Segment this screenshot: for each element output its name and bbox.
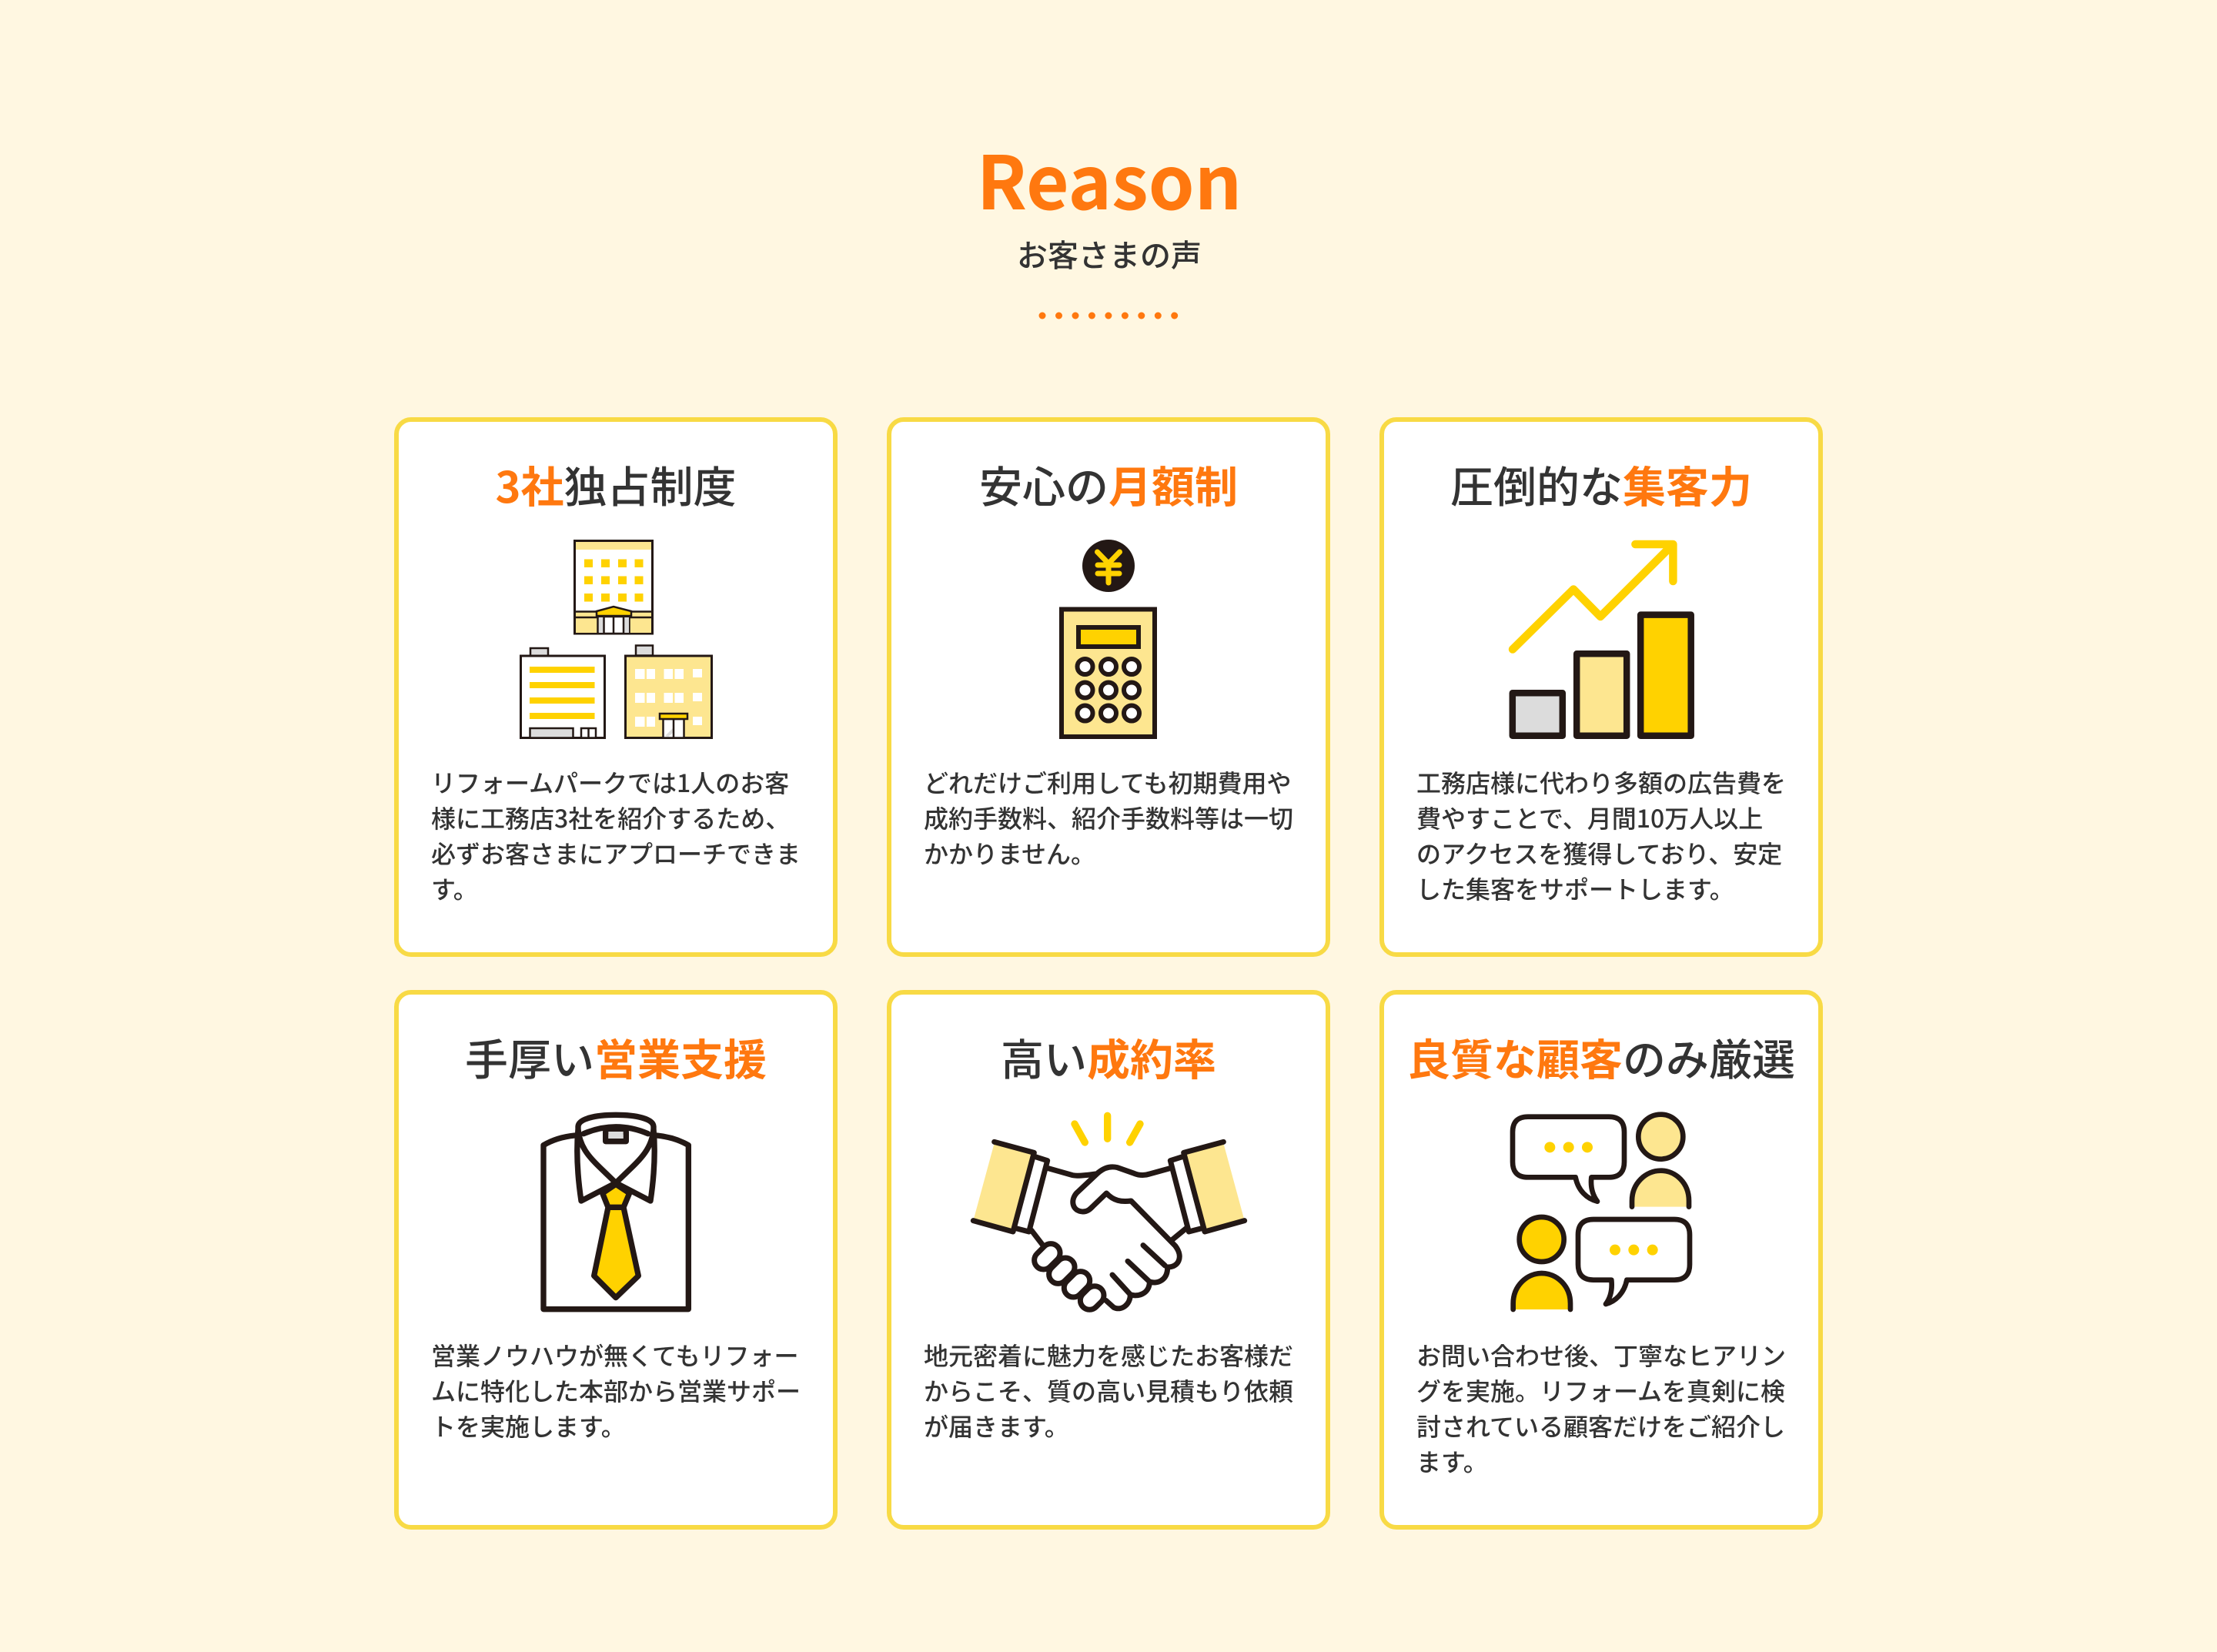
bars (1513, 615, 1691, 736)
body text (1416, 1336, 1786, 1478)
body text: 必ずお客さまにアプローチできま (431, 834, 801, 870)
right cuff (1170, 1142, 1245, 1232)
shirt body (543, 1135, 688, 1309)
body text: 様に工務店3社を紹介するため、 (431, 799, 790, 834)
body text: ます。 (1416, 1443, 1488, 1478)
heading: 3社独占制度 (495, 453, 737, 516)
body text: どれだけご利用しても初期費用や (924, 764, 1291, 799)
panel: 安心の月額制 (887, 417, 1330, 957)
panel: 3社独占制度 (394, 417, 838, 957)
panel: 高い成約率 (887, 990, 1330, 1530)
body text: ムに特化した本部から営業サポー (431, 1372, 801, 1407)
body text: のアクセスを獲得しており、安定 (1416, 834, 1782, 870)
yen coin (1082, 540, 1135, 592)
left cuff (973, 1142, 1048, 1232)
title: Reason: Reason (977, 124, 1242, 231)
body text (1416, 764, 1786, 905)
body text: グを実施。リフォームを真剣に検 (1416, 1372, 1785, 1407)
hand outlines (1032, 1167, 1187, 1309)
body text: 地元密着に魅力を感じたお客様だ (924, 1336, 1293, 1372)
body text (431, 764, 801, 905)
icon: calculator and yen coin (1059, 540, 1157, 739)
heading: 手厚い営業支援 (465, 1026, 767, 1089)
neck label (606, 1132, 626, 1142)
icon: shirt and tie (540, 1112, 691, 1312)
body text: 工務店様に代わり多額の広告費を (1416, 764, 1786, 799)
body text: お問い合わせ後、丁寧なヒアリン (1416, 1336, 1786, 1372)
body text (924, 764, 1293, 870)
body text: す。 (431, 870, 478, 905)
bottom left building (520, 648, 605, 737)
collar (577, 1115, 654, 1201)
body text: からこそ、質の高い見積もり依頼 (924, 1372, 1293, 1407)
panel: 手厚い営業支援 (394, 990, 838, 1530)
body text (924, 1336, 1293, 1443)
body text: 営業ノウハウが無くてもリフォー (431, 1336, 798, 1372)
body text: リフォームパークでは1人のお客 (431, 764, 789, 799)
panel: 良質な顧客のみ厳選 (1379, 990, 1823, 1530)
tie (594, 1184, 638, 1298)
body text: 成約手数料、紹介手数料等は一切 (924, 799, 1293, 834)
speech bubble 1 (1513, 1117, 1624, 1202)
sparkle rays (1075, 1115, 1140, 1142)
body text (431, 1336, 801, 1443)
heading: 圧倒的な集客力 (1450, 453, 1752, 516)
speech bubble 2 (1578, 1219, 1690, 1304)
icon: rising bar chart (1509, 540, 1694, 739)
heading: 高い成約率 (1001, 1026, 1216, 1089)
body text: トを実施します。 (431, 1407, 626, 1443)
left fingers (1031, 1240, 1108, 1313)
trend arrow (1513, 544, 1673, 650)
heading: 良質な顧客のみ厳選 (1407, 1026, 1795, 1089)
icon: handshake (970, 1112, 1247, 1313)
subtitle: お客さまの声 (1017, 231, 1202, 276)
dotted divider (1039, 313, 1178, 319)
body text: 費やすことで、月間10万人以上 (1416, 799, 1763, 834)
body text: かかりません。 (924, 834, 1095, 870)
heading: 安心の月額制 (979, 453, 1238, 516)
icon: two people talking (1510, 1112, 1692, 1312)
panel: 圧倒的な集客力 (1379, 417, 1823, 957)
person 1 (1632, 1115, 1689, 1207)
top building (574, 540, 653, 634)
bottom right building (625, 645, 711, 737)
icon: three buildings (520, 540, 713, 739)
body text: した集客をサポートします。 (1416, 870, 1734, 905)
body text: が届きます。 (924, 1407, 1069, 1443)
person 2 (1513, 1217, 1570, 1309)
calculator (1062, 610, 1155, 737)
body text: 討されている顧客だけをご紹介し (1416, 1407, 1785, 1443)
